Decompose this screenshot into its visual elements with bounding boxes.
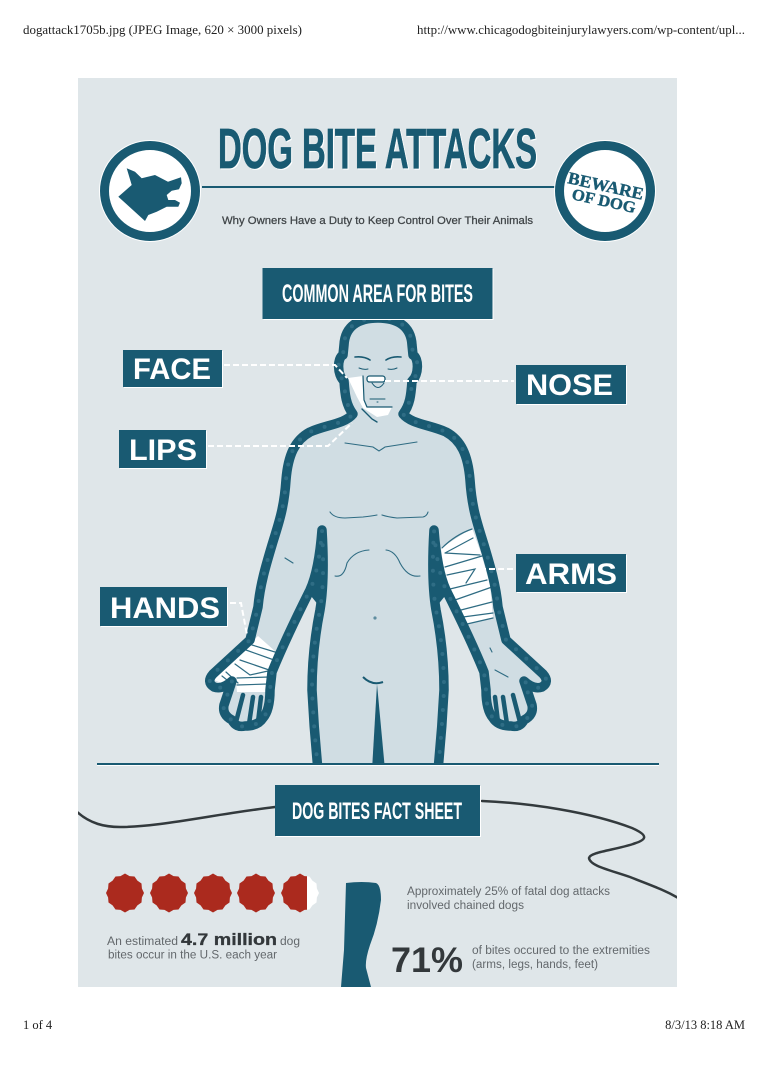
icon: beware of dog stamp: BEWARE bbox=[566, 168, 645, 204]
body outline bbox=[210, 318, 546, 770]
browser header: file name: dogattack1705b.jpg (JPEG Image, 620 × 3000 pixels) bbox=[23, 23, 302, 37]
callout: face: FACE bbox=[133, 353, 211, 386]
bandage: face bbox=[348, 376, 392, 417]
callout: nose: NOSE bbox=[526, 369, 613, 402]
facial features bbox=[355, 357, 401, 422]
footer: date: 8/3/13 8:18 AM bbox=[665, 1018, 745, 1032]
stat: 4.7 million dog bites: 4.7 million bbox=[181, 930, 277, 949]
title: DOG BITE ATTACKS bbox=[218, 117, 537, 181]
icon: dog head badge bbox=[99, 140, 201, 242]
section heading: common area for bites bbox=[262, 268, 494, 320]
chest and torso lines bbox=[285, 442, 508, 677]
title bbox=[218, 117, 538, 182]
section heading: dog bites fact sheet: DOG BITES FACT SHEET bbox=[292, 798, 462, 825]
icon: teal leg silhouette bbox=[341, 882, 381, 987]
stat: 71 percent extremities bbox=[391, 941, 650, 980]
stat: 71 percent extremities: 71% bbox=[391, 941, 463, 980]
callout: face bbox=[123, 350, 347, 388]
browser header: url: http://www.chicagodogbiteinjurylawyers.com/wp-content/upl... bbox=[417, 23, 745, 37]
section heading: dog bites fact sheet bbox=[275, 785, 481, 837]
stat: 71 percent extremities: (arms, legs, hands, feet) bbox=[472, 959, 598, 971]
callout: hands bbox=[100, 587, 247, 635]
callout: lips: LIPS bbox=[129, 434, 197, 467]
callout: nose bbox=[385, 365, 627, 405]
stat: 4.7 million dog bites: bites occur in the U.S. each year bbox=[108, 950, 277, 962]
callout: arms: ARMS bbox=[525, 558, 617, 591]
stat: 71 percent extremities: of bites occured to the extremities bbox=[472, 945, 650, 957]
fingers bbox=[236, 695, 520, 724]
stat: chained dogs: Approximately 25% of fatal dog attacks bbox=[407, 886, 610, 898]
subtitle: Why Owners Have a Duty to Keep Control Over Their Animals bbox=[222, 215, 534, 227]
callout: arms bbox=[480, 554, 627, 593]
icon: beware of dog stamp: OF DOG bbox=[570, 186, 638, 217]
chain rope line bbox=[76, 801, 680, 899]
icon row: five red seals (4.7 of 5) bbox=[106, 874, 319, 912]
stat: chained dogs bbox=[407, 886, 610, 912]
footer: page number: 1 of 4 bbox=[23, 1018, 53, 1032]
figure baseline bbox=[97, 763, 659, 766]
stat: 4.7 million dog bites: An estimated bbox=[107, 936, 178, 948]
human body figure bbox=[210, 318, 546, 770]
section heading: common area for bites: COMMON AREA FOR BITES bbox=[282, 280, 473, 308]
stat: 4.7 million dog bites bbox=[107, 930, 300, 962]
infographic panel background bbox=[78, 78, 677, 987]
bandage: hand bbox=[214, 636, 276, 692]
stat: chained dogs: involved chained dogs bbox=[407, 900, 524, 912]
bandage: arm bbox=[441, 528, 493, 624]
callout: hands: HANDS bbox=[110, 592, 220, 625]
stat: 4.7 million dog bites: dog bbox=[280, 936, 300, 948]
callout: lips bbox=[119, 423, 352, 469]
navel bbox=[373, 616, 377, 620]
armpit wedges and inner leg bbox=[312, 582, 318, 603]
icon: beware of dog stamp bbox=[554, 140, 656, 242]
title: DOG BITE ATTACKS bbox=[219, 118, 538, 182]
header rule bbox=[202, 186, 555, 188]
